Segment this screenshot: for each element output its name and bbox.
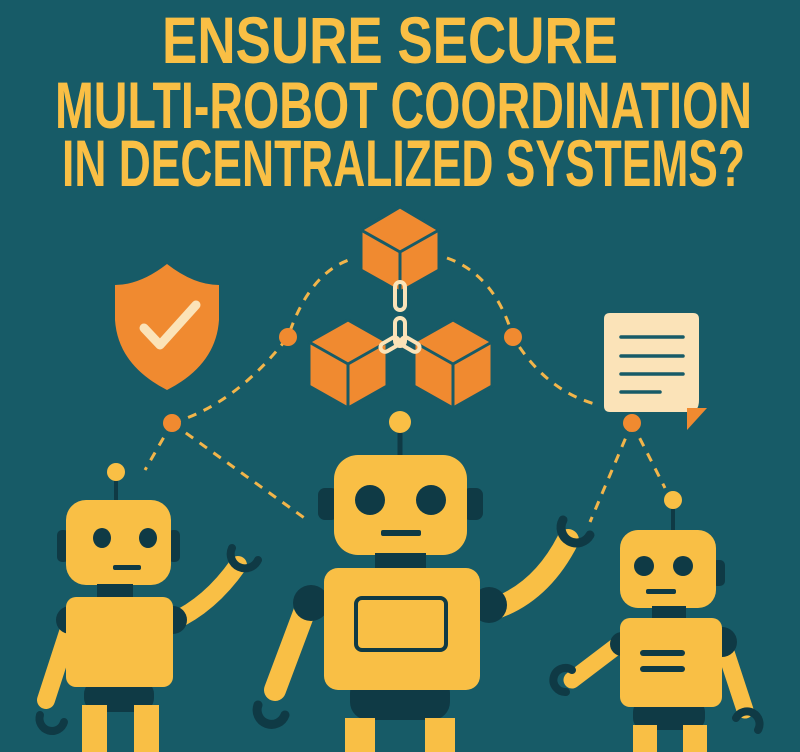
robot: right [553, 491, 760, 752]
network nodes [163, 328, 641, 432]
icon: shield [115, 264, 219, 390]
icon: chain links [379, 282, 421, 353]
icon: document [604, 313, 707, 430]
dashed network lines [145, 258, 665, 522]
robot: left [40, 463, 258, 752]
title: ENSURE SECURE [162, 3, 618, 77]
robot: center [257, 411, 590, 752]
title [55, 3, 752, 200]
icon: blockchain cubes [309, 207, 492, 408]
